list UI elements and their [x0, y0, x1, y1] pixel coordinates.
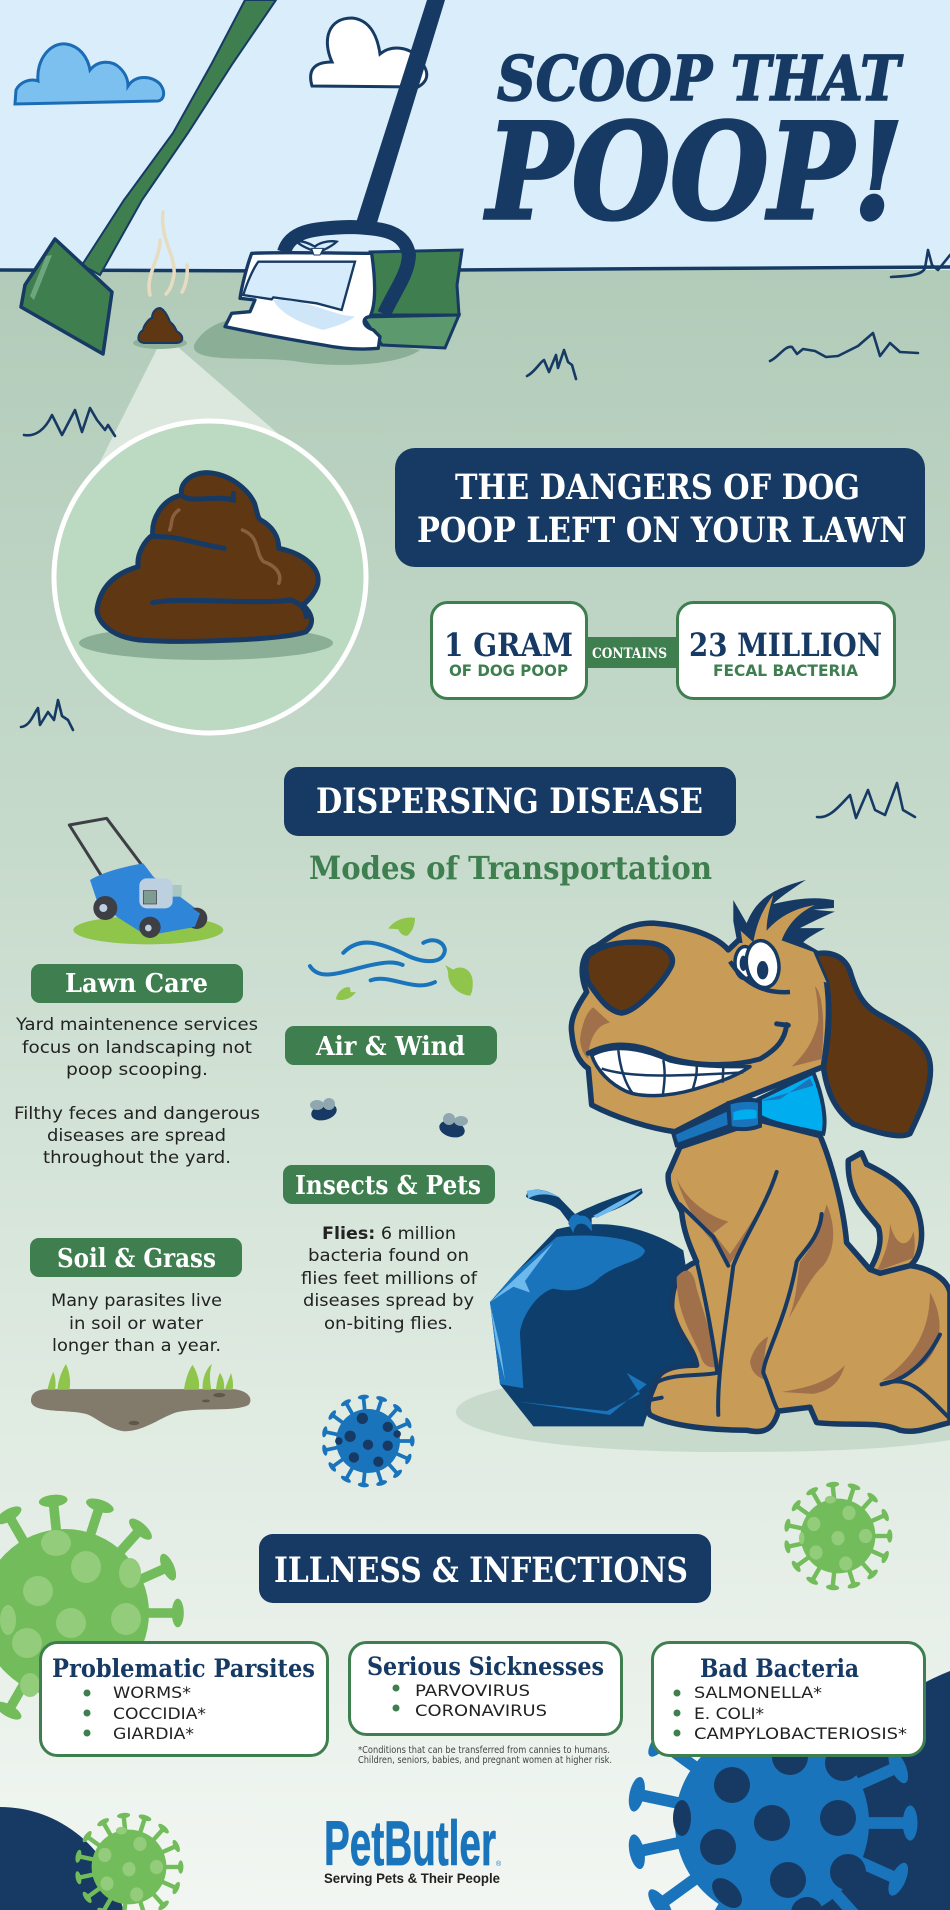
scooper arc — [284, 227, 409, 314]
small poop with steam — [133, 212, 187, 349]
panel: problematic parasites: Problematic Parsites — [52, 1654, 315, 1683]
stat: 1 gram box: 1 GRAM — [444, 626, 573, 664]
stat: contains connector: CONTAINS — [592, 646, 667, 662]
heading: illness and infections — [259, 1534, 711, 1603]
stat: 23 million box — [678, 602, 894, 698]
heading: dispersing disease: DISPERSING DISEASE — [316, 781, 703, 822]
white bag — [225, 241, 380, 349]
illustration: dog — [571, 880, 950, 1432]
dog nose — [586, 942, 672, 1013]
logo: PetButler — [324, 1809, 502, 1886]
panel: soil and grass: in soil or water — [69, 1314, 203, 1334]
panel: lawn care: diseases are spread — [47, 1126, 226, 1146]
panel: air and wind: Air & Wind — [315, 1032, 465, 1062]
scooper with bag — [225, 0, 462, 349]
dog body — [648, 1120, 950, 1432]
icon: wind and leaves — [310, 918, 473, 1000]
icon: fly right — [437, 1113, 468, 1140]
horizon line — [0, 267, 950, 271]
navy corner shape right — [794, 1671, 950, 1910]
panel: bad bacteria: SALMONELLA* — [694, 1683, 822, 1702]
panel: lawn care: focus on landscaping not — [22, 1038, 252, 1058]
panel: problematic parasites: GIARDIA* — [113, 1724, 194, 1743]
heading: dispersing disease — [284, 767, 736, 836]
icon: large poop — [97, 473, 318, 641]
panel: soil and grass: Many parasites live — [51, 1291, 222, 1311]
icon: green virus bottom left — [74, 1812, 183, 1910]
icon: fly left — [309, 1098, 339, 1123]
navy corner shape left — [0, 1807, 123, 1910]
subheading: modes of transportation: Modes of Transportation — [309, 849, 712, 887]
dog shadow — [456, 1372, 950, 1452]
dog eyes — [730, 936, 790, 992]
magnified poop circle — [54, 421, 366, 733]
icon: large green virus — [0, 1493, 184, 1733]
heading: dangers banner — [395, 448, 925, 567]
dog hair tufts — [733, 880, 835, 960]
icon: lawn mower — [69, 818, 223, 944]
scooper handle — [355, 0, 445, 226]
panel: bad bacteria: CAMPYLOBACTERIOSIS* — [694, 1724, 907, 1743]
panel: soil and grass — [30, 1238, 242, 1356]
dog teeth — [592, 1048, 750, 1096]
panel: problematic parasites: WORMS* — [113, 1683, 191, 1702]
title — [484, 42, 903, 250]
panel: air and wind — [285, 1026, 497, 1065]
panel: insects and pets: diseases spread by — [303, 1291, 474, 1311]
icon: large blue virus — [628, 1742, 918, 1910]
stat: contains connector — [585, 637, 678, 668]
panel: bad bacteria: E. COLI* — [694, 1704, 764, 1723]
panel: insects and pets: on-biting flies. — [324, 1314, 453, 1334]
dog bow tie — [673, 1072, 825, 1145]
stat: 1 gram box — [432, 602, 586, 698]
panel: bad bacteria — [652, 1642, 924, 1756]
panel: insects and pets — [283, 1165, 495, 1334]
light beam from poop to magnified circle — [96, 335, 320, 470]
icon: white cloud — [311, 18, 427, 87]
icon: blue virus small — [321, 1394, 415, 1488]
title line 1: SCOOP THAT — [497, 42, 903, 115]
green shovel — [21, 0, 276, 354]
scooper tray — [363, 315, 459, 348]
panel: insects and pets: flies feet millions of — [301, 1269, 478, 1289]
panel: problematic parasites — [40, 1642, 328, 1756]
footnote — [358, 1745, 612, 1766]
panel: insects and pets: Flies: 6 million — [322, 1224, 456, 1244]
stat: 23 million box: 23 MILLION — [689, 626, 882, 664]
logo: PetButler: Serving Pets & Their People — [324, 1870, 500, 1886]
panel: lawn care: throughout the yard. — [43, 1148, 231, 1168]
icon: blue cloud — [15, 44, 164, 104]
heading: illness and infections: ILLNESS & INFECTIONS — [274, 1550, 688, 1591]
steam — [149, 212, 187, 295]
panel: soil and grass: longer than a year. — [52, 1336, 221, 1356]
panel: insects and pets: Insects & Pets — [295, 1171, 481, 1201]
logo: PetButler: ® — [496, 1860, 502, 1868]
panel: lawn care: poop scooping. — [66, 1060, 208, 1080]
logo: PetButler: PetButler — [324, 1809, 496, 1879]
panel: bad bacteria: Bad Bacteria — [700, 1654, 859, 1683]
rake shadow — [194, 318, 420, 365]
icon: soil with grass — [31, 1364, 250, 1431]
dog head — [571, 895, 828, 1132]
panel: insects and pets: bacteria found on — [308, 1246, 469, 1266]
stat: 23 million box: FECAL BACTERIA — [713, 661, 859, 680]
heading: dangers banner: THE DANGERS OF DOG — [455, 467, 860, 508]
footnote: Children, seniors, babies, and pregnant women at higher risk. — [358, 1755, 612, 1766]
panel: lawn care — [14, 964, 260, 1168]
panel: serious sicknesses: Serious Sicknesses — [367, 1652, 604, 1681]
sky background — [0, 0, 950, 272]
illustration: garbage bag — [490, 1188, 700, 1426]
panel: soil and grass: Soil & Grass — [57, 1244, 216, 1274]
panel: lawn care: Filthy feces and dangerous — [14, 1104, 260, 1124]
icon: green virus top right — [783, 1481, 892, 1591]
dog smile — [588, 1024, 788, 1065]
panel: lawn care: Lawn Care — [65, 969, 208, 999]
panel: lawn care: Yard maintenence services — [15, 1015, 258, 1035]
dog tail — [848, 1153, 922, 1283]
panel: serious sicknesses: PARVOVIRUS — [415, 1681, 530, 1700]
squiggle grass tufts — [21, 250, 950, 818]
scooper box — [370, 250, 462, 315]
dog ear — [810, 953, 930, 1136]
panel: problematic parasites: COCCIDIA* — [113, 1704, 206, 1723]
stat: 1 gram box: OF DOG POOP — [449, 661, 568, 680]
footnote: *Conditions that can be transferred from cannies to humans. — [358, 1745, 610, 1756]
panel: serious sicknesses: CORONAVIRUS — [415, 1701, 547, 1720]
panel: serious sicknesses — [350, 1642, 622, 1734]
